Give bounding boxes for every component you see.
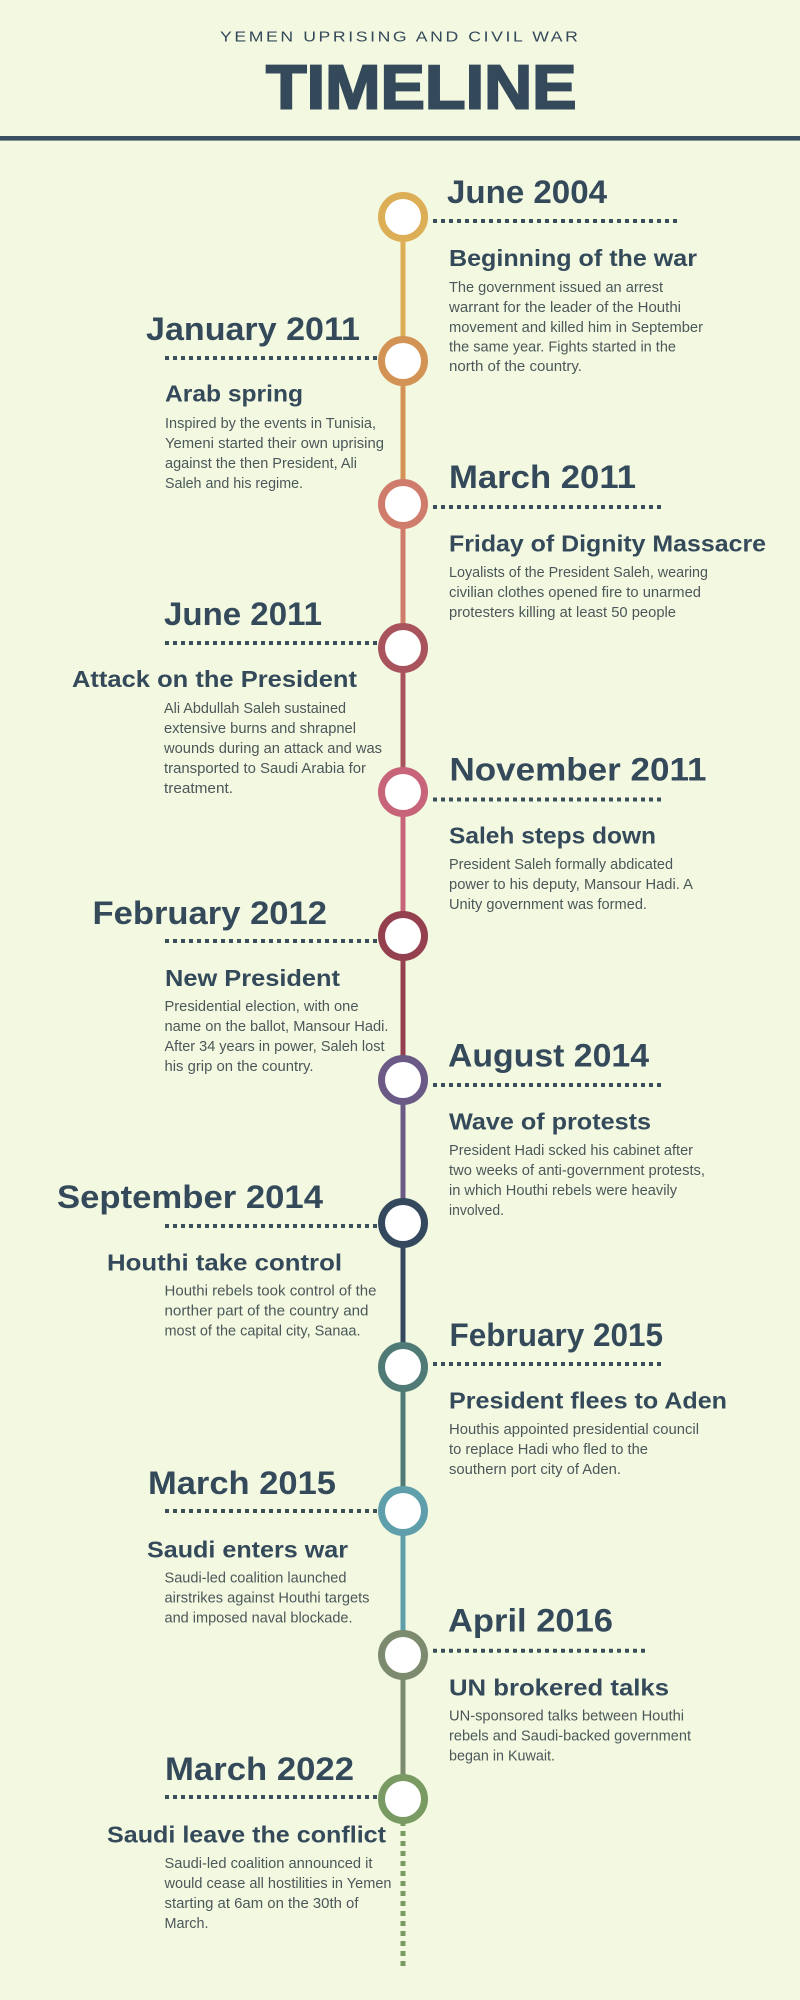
description: President Saleh formally abdicated: [449, 856, 673, 873]
description: Loyalists of the President Saleh, wearing: [449, 564, 708, 581]
marker: [382, 1058, 424, 1102]
event: February 2012: [92, 895, 424, 1075]
description: protesters killing at least 50 people: [449, 604, 676, 621]
connector: [433, 798, 663, 802]
date: June 2011: [164, 596, 322, 632]
connector: [433, 505, 665, 509]
event: November 2011: [382, 752, 706, 913]
description: starting at 6am on the 30th of: [164, 1895, 359, 1912]
event: June 2004: [382, 174, 703, 375]
connector: [165, 641, 381, 645]
description: [449, 564, 708, 621]
description: warrant for the leader of the Houthi: [448, 299, 681, 316]
event: January 2011: [146, 311, 424, 492]
description: [449, 1142, 705, 1219]
heading: Saudi leave the conflict: [107, 1822, 386, 1848]
description: Saudi-led coalition announced it: [164, 1855, 373, 1872]
description: [449, 856, 693, 913]
description: to replace Hadi who fled to the: [449, 1441, 648, 1458]
heading: Attack on the President: [72, 666, 357, 692]
description: norther part of the country and: [164, 1303, 368, 1320]
description: UN-sponsored talks between Houthi: [449, 1708, 684, 1725]
description: wounds during an attack and was: [163, 740, 382, 757]
description: Inspired by the events in Tunisia,: [165, 415, 376, 432]
heading: Friday of Dignity Massacre: [449, 531, 766, 557]
description: power to his deputy, Mansour Hadi. A: [449, 876, 693, 893]
heading: Wave of protests: [449, 1108, 651, 1134]
marker: [382, 914, 424, 958]
date: November 2011: [450, 752, 706, 788]
description: [163, 700, 382, 797]
description: Ali Abdullah Saleh sustained: [164, 700, 346, 717]
description: transported to Saudi Arabia for: [164, 760, 366, 777]
header: [220, 29, 580, 123]
marker: [382, 1490, 424, 1532]
description: Presidential election, with one: [164, 998, 358, 1015]
description: his grip on the country.: [164, 1058, 314, 1075]
connector: [433, 1362, 663, 1366]
description: and imposed naval blockade.: [164, 1610, 352, 1627]
event: March 2015: [147, 1465, 424, 1627]
event: March 2022: [107, 1751, 424, 1932]
event: April 2016: [382, 1603, 692, 1765]
description: began in Kuwait.: [449, 1748, 555, 1765]
event: June 2011: [72, 596, 424, 797]
description: extensive burns and shrapnel: [164, 720, 356, 737]
marker: [382, 340, 424, 382]
description: Yemeni started their own uprising: [165, 435, 384, 452]
description: [164, 998, 388, 1075]
marker: [382, 1202, 424, 1244]
description: [164, 1570, 370, 1627]
connector: [165, 356, 381, 360]
description: After 34 years in power, Saleh lost: [164, 1038, 385, 1055]
connector: [433, 219, 677, 223]
heading: Houthi take control: [107, 1250, 342, 1276]
heading: President flees to Aden: [449, 1387, 727, 1413]
description: north of the country.: [449, 358, 582, 375]
description: civilian clothes opened fire to unarmed: [449, 584, 701, 601]
event: September 2014: [57, 1179, 424, 1340]
description: two weeks of anti-government protests,: [449, 1162, 705, 1179]
marker: [382, 1634, 424, 1676]
connector: [433, 1649, 648, 1653]
description: March.: [164, 1915, 208, 1932]
description: [164, 1855, 392, 1932]
marker: [382, 1346, 424, 1388]
description: [164, 1283, 376, 1340]
connector: [165, 939, 381, 943]
description: [165, 415, 384, 492]
description: Houthi rebels took control of the: [164, 1283, 376, 1300]
description: Saleh and his regime.: [165, 475, 303, 492]
description: [448, 279, 703, 375]
description: would cease all hostilities in Yemen: [164, 1875, 392, 1892]
date: September 2014: [57, 1179, 323, 1215]
description: Houthis appointed presidential council: [449, 1421, 699, 1438]
date: January 2011: [146, 311, 360, 347]
connector: [433, 1083, 663, 1087]
heading: Beginning of the war: [449, 245, 697, 271]
description: movement and killed him in September: [449, 319, 703, 336]
heading: New President: [165, 965, 340, 991]
date: March 2022: [165, 1751, 354, 1787]
event: February 2015: [382, 1317, 727, 1478]
description: [449, 1708, 692, 1765]
heading: UN brokered talks: [449, 1675, 669, 1701]
description: President Hadi scked his cabinet after: [449, 1142, 693, 1159]
description: name on the ballot, Mansour Hadi.: [164, 1018, 388, 1035]
date: March 2011: [449, 459, 636, 495]
description: against the then President, Ali: [165, 455, 357, 472]
description: The government issued an arrest: [449, 279, 664, 296]
description: the same year. Fights started in the: [449, 338, 676, 356]
description: most of the capital city, Sanaa.: [164, 1323, 360, 1340]
date: June 2004: [447, 174, 607, 210]
description: southern port city of Aden.: [449, 1461, 621, 1478]
description: [449, 1421, 699, 1478]
marker: [382, 1778, 424, 1820]
marker: [382, 770, 424, 814]
date: February 2012: [92, 895, 327, 931]
description: Unity government was formed.: [449, 896, 647, 913]
heading: Saleh steps down: [449, 822, 656, 848]
description: involved.: [449, 1202, 504, 1219]
heading: Arab spring: [165, 381, 303, 407]
event: March 2011: [382, 459, 766, 621]
description: Saudi-led coalition launched: [164, 1570, 346, 1587]
connector: [165, 1509, 381, 1513]
description: treatment.: [164, 780, 233, 797]
event: August 2014: [382, 1038, 705, 1219]
heading: Saudi enters war: [147, 1536, 348, 1562]
connector: [165, 1795, 381, 1799]
date: August 2014: [448, 1038, 649, 1074]
marker: [382, 482, 424, 526]
date: March 2015: [148, 1465, 336, 1501]
description: rebels and Saudi-backed government: [449, 1728, 692, 1745]
marker: [382, 626, 424, 670]
description: airstrikes against Houthi targets: [164, 1590, 370, 1607]
date: February 2015: [450, 1317, 663, 1353]
header rule: [0, 136, 800, 141]
timeline spine: [400, 217, 406, 1966]
description: in which Houthi rebels were heavily: [449, 1182, 677, 1199]
title: TIMELINE: [266, 54, 576, 123]
date: April 2016: [448, 1603, 613, 1639]
connector: [165, 1224, 381, 1228]
subtitle: YEMEN UPRISING AND CIVIL WAR: [220, 29, 580, 46]
marker: [382, 196, 424, 238]
